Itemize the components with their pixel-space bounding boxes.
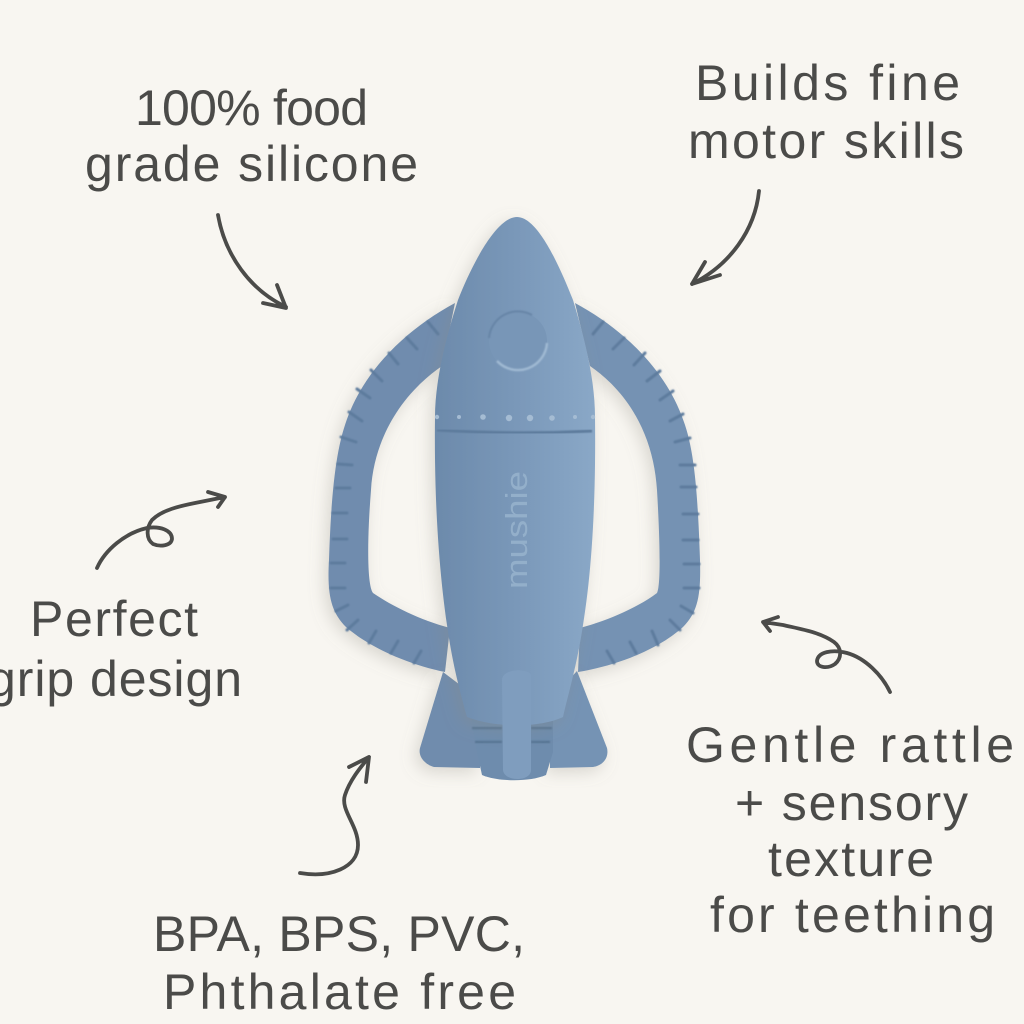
rocket body	[435, 217, 595, 725]
text: gentle rattle: for teething	[710, 887, 995, 943]
text: gentle rattle: texture	[768, 831, 934, 887]
rivets and seam	[435, 414, 595, 433]
text: gentle rattle: + sensory	[735, 775, 968, 831]
brand emboss: mushie	[499, 471, 534, 589]
text: food grade silicone	[85, 80, 418, 192]
arrow: BPA free	[300, 757, 369, 874]
rocket nozzle	[470, 710, 553, 780]
rocket teether	[329, 217, 700, 780]
arrow: perfect grip design	[97, 492, 225, 568]
callout: BPA free	[153, 757, 525, 1020]
centre fin	[502, 670, 531, 779]
text: fine motor skills	[688, 55, 964, 169]
porthole	[489, 311, 547, 370]
callout: gentle rattle	[686, 617, 1014, 943]
text: fine motor skills: motor skills	[688, 113, 964, 169]
text: BPA free	[153, 906, 525, 1020]
text: gentle rattle	[686, 717, 1014, 943]
text: perfect grip design: Perfect	[30, 591, 198, 647]
rocket handles	[329, 303, 700, 672]
rocket fins	[420, 671, 607, 768]
text: food grade silicone: 100% food	[135, 80, 368, 136]
text: food grade silicone: grade silicone	[85, 136, 418, 192]
text: BPA free: Phthalate free	[163, 964, 516, 1020]
handle ridges	[331, 322, 699, 663]
callout: food grade silicone	[85, 80, 418, 308]
text: fine motor skills: Builds fine	[695, 55, 960, 111]
arrow: food grade silicone	[218, 215, 286, 308]
arrow: gentle rattle	[763, 617, 890, 692]
text: gentle rattle: Gentle rattle	[686, 717, 1014, 773]
arrow: fine motor skills	[692, 191, 759, 284]
callout: perfect grip design	[0, 492, 242, 707]
text: BPA free: BPA, BPS, PVC,	[153, 906, 525, 962]
callout: fine motor skills	[688, 55, 964, 284]
text: perfect grip design	[0, 591, 242, 707]
